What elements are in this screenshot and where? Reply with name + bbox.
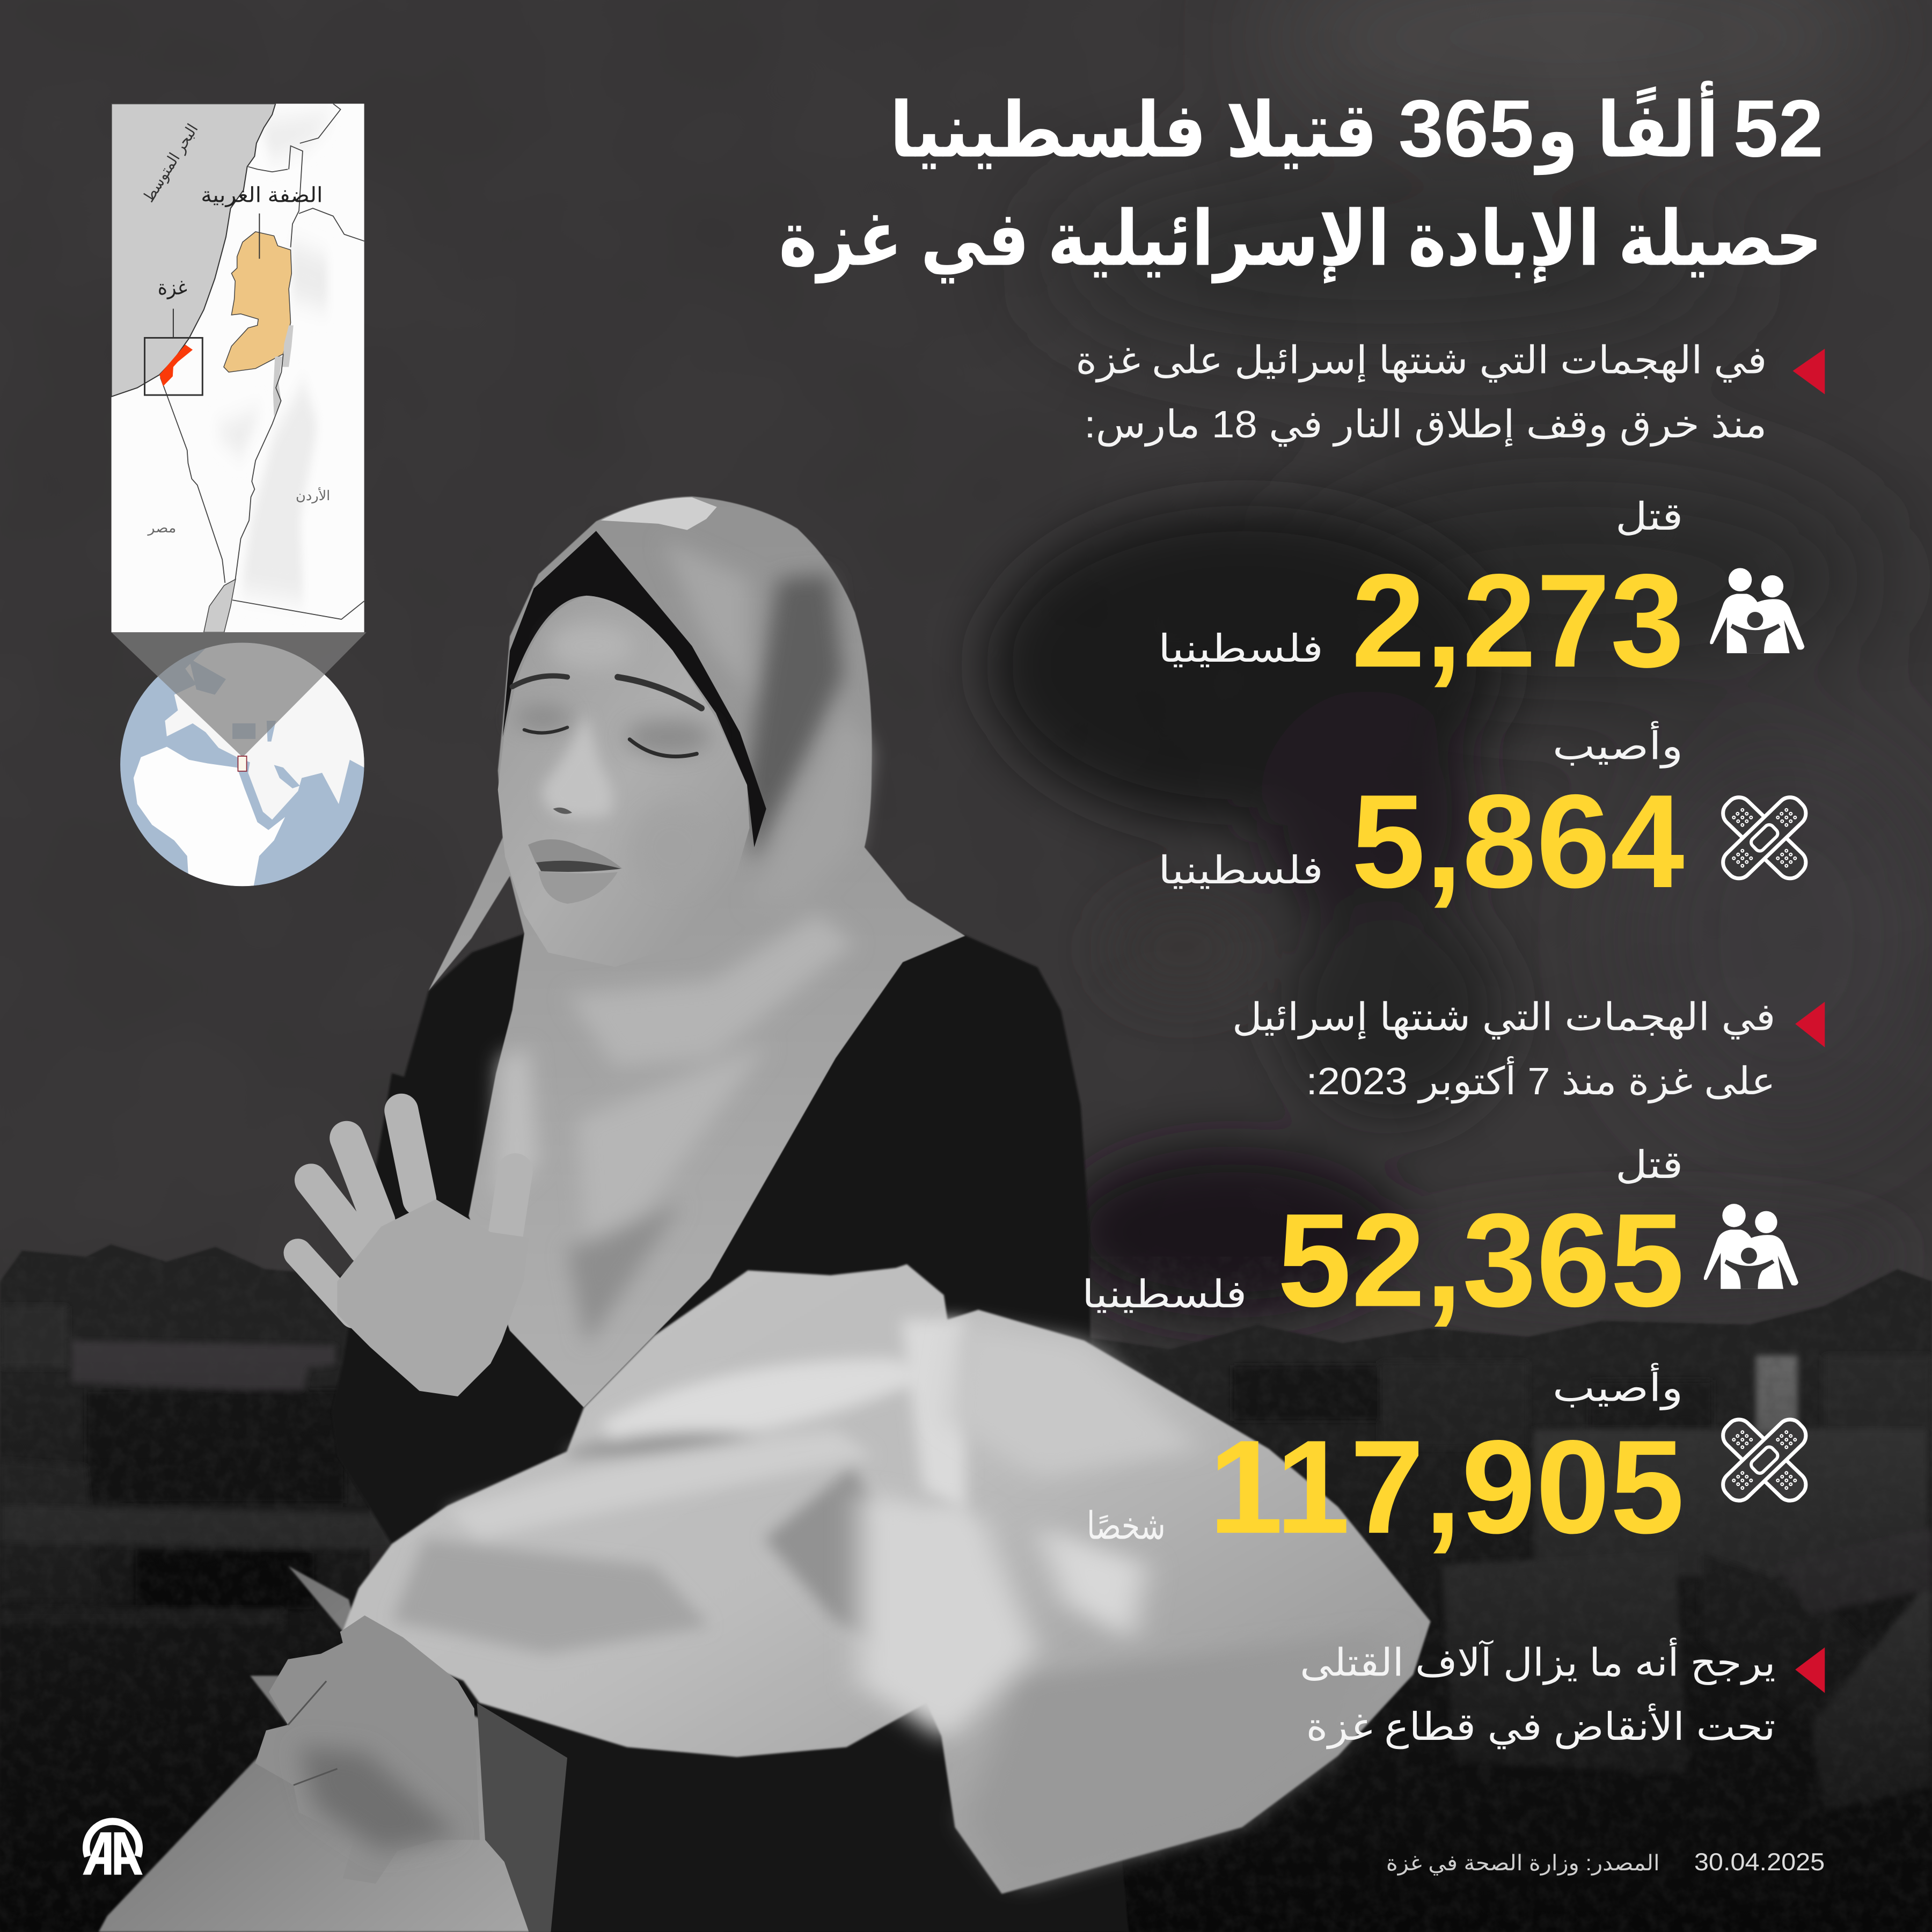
stat: 2,273: 2,273 [1351, 546, 1685, 695]
intro text line 2: منذ خرق وقف إطلاق النار في 18 مارس: [1084, 403, 1767, 447]
headscarf, veil and face [428, 496, 965, 1407]
icon: bandage [1718, 792, 1811, 884]
sea [112, 104, 275, 397]
headscarf [428, 496, 965, 1407]
footer [1386, 1849, 1825, 1877]
title line 1: ألفًا و [1533, 80, 1719, 176]
globe [112, 632, 367, 886]
section: since October 7 [1082, 996, 1825, 1561]
black garment [332, 934, 1129, 1932]
lower shroud fold [99, 1566, 530, 1932]
unit: Palestinians: فلسطينيا [1158, 849, 1323, 892]
source: المصدر: وزارة الصحة في غزة [1386, 1850, 1660, 1877]
label: killed: قتل [1615, 495, 1683, 538]
intro text line 1: في الهجمات التي شنتها إسرائيل على غزة [1075, 339, 1767, 383]
title line 1: قتيلا فلسطينيا [890, 89, 1378, 174]
icon: family [1710, 568, 1804, 653]
stat: 5,864: 5,864 [1351, 766, 1685, 916]
inner veil [503, 531, 766, 847]
label: wounded: وأصيب [1553, 721, 1683, 769]
wrapped child shroud [342, 1264, 1431, 1894]
title line 1 [890, 80, 1824, 176]
scarf highlight patch [601, 497, 717, 530]
label: killed: قتل [1615, 1144, 1683, 1187]
unit: Palestinians: فلسطينيا [1158, 627, 1323, 670]
rubble: skyline and ruins [0, 1245, 1932, 1932]
label: wounded: وأصيب [1553, 1363, 1683, 1411]
note line 1: يرجح أنه ما يزال آلاف القتلى [1300, 1637, 1775, 1686]
zoom funnel [112, 632, 367, 757]
map label: west bank: الضفة الغربية [201, 184, 323, 208]
map label: jordan: الأردن [296, 487, 330, 504]
unit: Palestinians: فلسطينيا [1082, 1273, 1247, 1316]
date: 30.04.2025 [1694, 1849, 1825, 1877]
red marker [1793, 349, 1825, 394]
raised hand [298, 1110, 529, 1396]
west bank [224, 232, 291, 372]
note line 2: تحت الأنقاض في قطاع غزة [1306, 1703, 1775, 1750]
stat: 52,365: 52,365 [1277, 1185, 1685, 1334]
red marker [1795, 1002, 1825, 1048]
unit: persons: شخصًا [1087, 1504, 1166, 1548]
icon: bandage [1718, 1414, 1811, 1506]
icon: family [1704, 1204, 1798, 1289]
face [498, 596, 749, 967]
stat: 117,905: 117,905 [1209, 1412, 1685, 1561]
title line 1: 365 [1399, 83, 1534, 174]
red marker [1795, 1648, 1825, 1693]
map label: gaza: غزة [158, 277, 188, 301]
intro text line 2: على غزة منذ 7 أكتوبر 2023: [1306, 1056, 1775, 1104]
intro text line 1: في الهجمات التي شنتها إسرائيل [1232, 996, 1775, 1040]
section: since March 18 [1075, 339, 1825, 916]
title line 1: 52 [1733, 83, 1824, 174]
map panel: Palestine location [112, 104, 367, 886]
title [779, 80, 1824, 284]
logo: AA [83, 1821, 143, 1875]
map label: egypt: مصر [147, 521, 177, 536]
sleeve cuff [477, 1703, 567, 1932]
gaza strip [159, 345, 193, 386]
map label: sea: البحر المتوسط [140, 121, 202, 206]
scarf shading [495, 540, 869, 1345]
section: under the rubble [1300, 1637, 1825, 1750]
waters and borders [273, 325, 294, 416]
locator box [238, 756, 247, 771]
lower hand [255, 1615, 567, 1932]
shroud folds [392, 1320, 966, 1703]
photo: grieving woman holding wrapped child [99, 496, 1431, 1932]
inset map [112, 104, 364, 632]
